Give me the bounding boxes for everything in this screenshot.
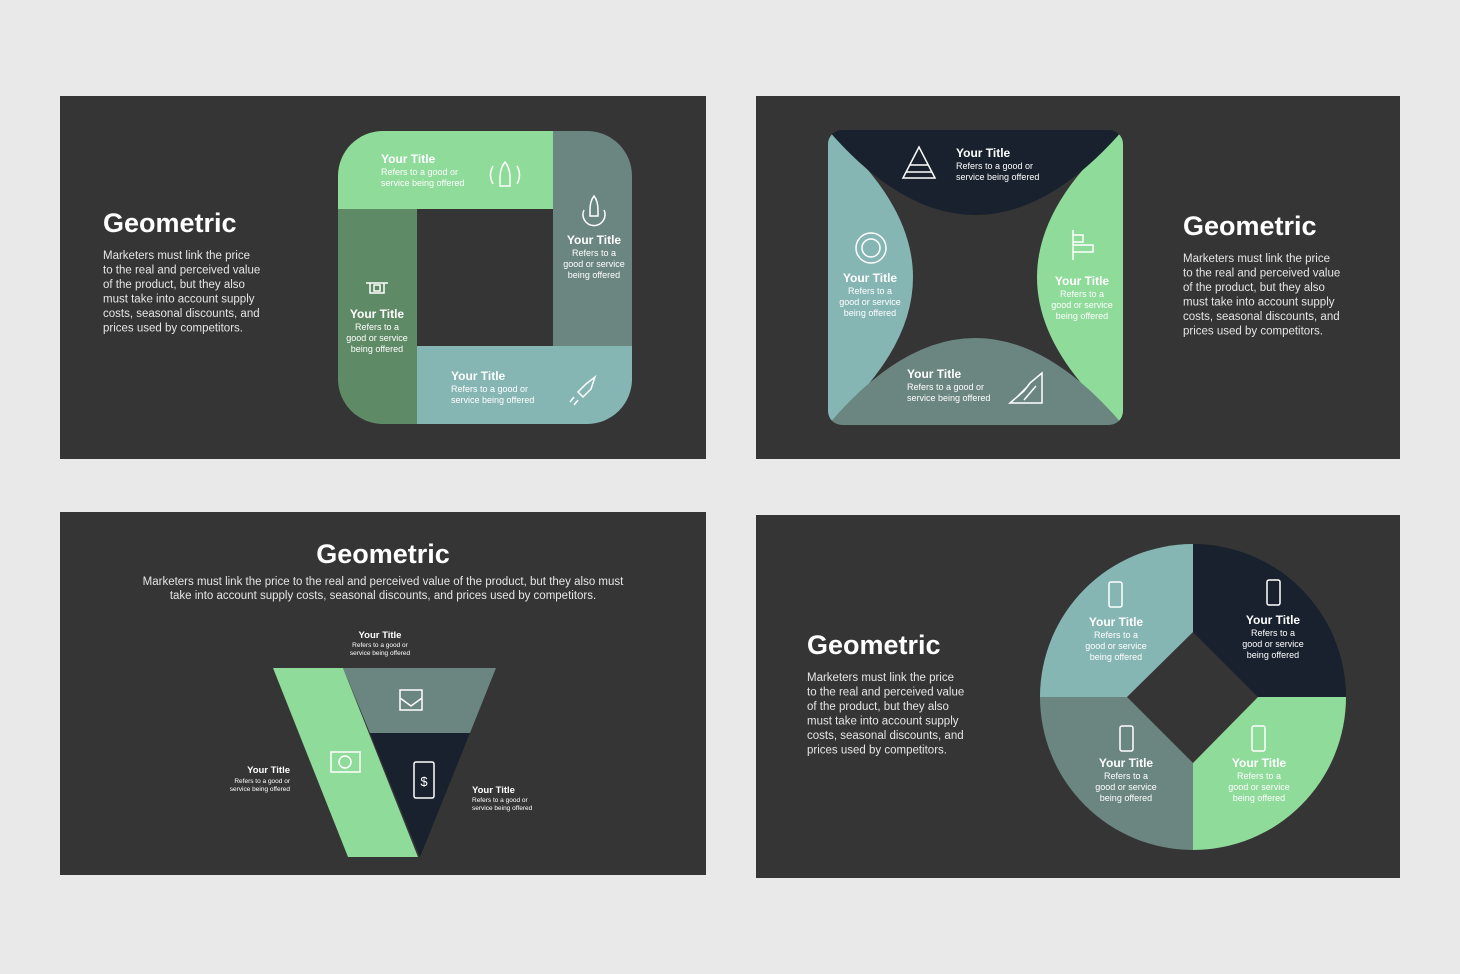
panel: top-right arcs: good or service [1051,300,1113,310]
text block: must take into account supply [807,716,959,728]
panel: bottom-right circle: Your Title [1099,756,1153,770]
circle diagram [1040,544,1346,850]
text block: take into account supply costs, seasonal discounts, and prices used by competitors. [170,590,596,602]
panel: top-left square: being offered [568,270,620,280]
text block: costs, seasonal discounts, and [103,308,260,320]
panel: top-right arcs: good or service [839,297,901,307]
icon: phone dollar: $ [420,774,428,789]
text block: prices used by competitors. [1183,326,1323,338]
panel: top-left square [60,96,706,459]
panel: bottom-right circle [756,515,1400,878]
icon: envelope [400,690,422,710]
arc square diagram [828,130,1123,425]
panel: top-left square: Your Title [350,307,404,321]
icon: pyramid [903,147,935,178]
panel: bottom-left triangle: Your Title [247,765,290,776]
panel: bottom-left triangle: service being offered [230,786,290,793]
icon: atm [366,283,388,293]
panel: bottom-left triangle: Refers to a good or [234,778,291,785]
panel: bottom-left triangle: Refers to a good or [472,797,528,804]
panel: bottom-right circle: good or service [1242,639,1304,649]
text block: prices used by competitors. [807,744,947,756]
panel: bottom-left triangle: service being offered [472,805,533,812]
panel: top-right arcs: service being offered [907,393,990,403]
panel: top-left square: Refers to a [572,248,616,258]
text block: to the real and perceived value [1183,268,1340,280]
icon: rocket [490,162,520,186]
text block: costs, seasonal discounts, and [1183,311,1340,323]
icon: rocket launch [583,196,605,226]
text block: costs, seasonal discounts, and [807,730,964,742]
icons: phones [1109,580,1280,751]
panel: top-right arcs: Refers to a [1060,289,1104,299]
panel: top-right arcs: being offered [1056,311,1108,321]
text block: of the product, but they also [1183,282,1325,294]
panel: bottom-left triangle: Your Title [359,630,401,641]
panel: top-left square: good or service [563,259,625,269]
panel: bottom-right circle: Your Title [1232,756,1286,770]
panel: top-right arcs: Refers to a good or [907,382,984,392]
panel: bottom-right circle: being offered [1233,793,1285,803]
panel: bottom-right circle: Refers to a [1237,771,1281,781]
panel: top-right arcs: Your Title [956,146,1011,160]
icon: rocket flying [570,377,595,405]
panel: top-left square: good or service [346,333,408,343]
text block: prices used by competitors. [103,322,243,334]
panel: bottom-right circle: being offered [1090,652,1142,662]
panel: top-right arcs: Refers to a [848,286,892,296]
panel: top-right arcs [756,96,1400,459]
text block: to the real and perceived value [807,686,964,698]
panel: top-right arcs: Your Title [843,271,897,285]
panel: top-left square: Refers to a good or [381,167,458,177]
panel: top-right arcs: being offered [844,308,896,318]
icon: cycle [856,233,886,263]
icon: bar chart [1073,230,1093,260]
panel: bottom-right circle: good or service [1095,782,1157,792]
panel: bottom-right circle: being offered [1247,650,1299,660]
triangle diagram [273,668,496,857]
panel: bottom-left triangle: Your Title [472,785,515,796]
panel: bottom-right circle: Refers to a [1094,630,1138,640]
panel: bottom-right circle: good or service [1085,641,1147,651]
panel: bottom-right circle: Your Title [1246,613,1300,627]
panel: bottom-left triangle: Refers to a good or [352,642,409,649]
heading: Geometric [1183,211,1317,241]
panel: top-right arcs: service being offered [956,172,1039,182]
panel: top-right arcs: Your Title [907,367,962,381]
panel: bottom-right circle: Refers to a [1104,771,1148,781]
icon: mountain chart [1010,373,1042,403]
panel: top-left square: service being offered [381,178,464,188]
panel: bottom-right circle: being offered [1100,793,1152,803]
panel: top-right arcs: Refers to a good or [956,161,1033,171]
text block: must take into account supply [1183,296,1335,308]
text block: Marketers must link the price [1183,253,1330,265]
text block: of the product, but they also [103,279,245,291]
text block: to the real and perceived value [103,264,260,276]
text block: of the product, but they also [807,701,949,713]
text block: Marketers must link the price [807,672,954,684]
panel: top-left square: Your Title [381,152,436,166]
panel: top-left square: Your Title [451,369,506,383]
panel: bottom-right circle: good or service [1228,782,1290,792]
icon: phone dollar [414,762,434,798]
text block: Marketers must link the price [103,250,250,262]
panel: top-left square: Refers to a good or [451,384,528,394]
heading: Geometric [103,208,237,238]
text block: must take into account supply [103,294,255,306]
panel: top-left square: being offered [351,344,403,354]
text block: Marketers must link the price to the real and perceived value of the product, but they also must [143,576,624,588]
panel: bottom-left triangle [60,512,706,875]
heading: Geometric [807,630,941,660]
panel: bottom-right circle: Your Title [1089,615,1143,629]
panel: bottom-left triangle: service being offered [350,650,410,657]
panel: top-left square: Your Title [567,233,621,247]
panel: bottom-right circle: Refers to a [1251,628,1295,638]
panel: top-left square: service being offered [451,395,534,405]
panel: top-left square: Refers to a [355,322,399,332]
heading: Geometric [316,539,450,569]
icon: camera money [331,752,360,772]
rounded square diagram [338,131,632,424]
panel: top-right arcs: Your Title [1055,274,1109,288]
